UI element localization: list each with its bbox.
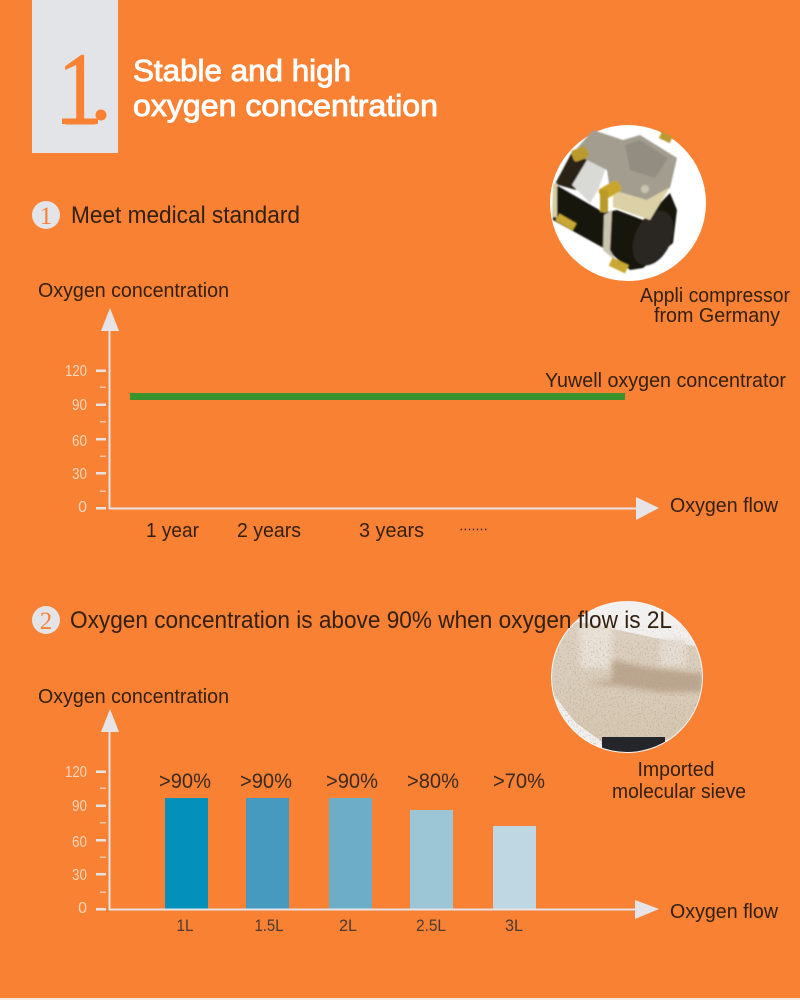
line chart [65,308,786,542]
bars [165,798,536,909]
x labels: 3 years [359,520,424,542]
y tick labels [65,764,87,917]
y ticks labels: 60 [72,433,87,450]
photo: compressor [550,125,706,281]
value labels: >90% [326,770,378,793]
y axis label 1: Oxygen concentration [38,280,229,302]
series label: Yuwell oxygen concentrator [545,370,786,392]
bar chart [65,709,779,935]
y tick labels: 120 [65,764,87,781]
caption: compressor: from Germany [654,305,780,327]
title [133,53,438,123]
category labels: 2.5L [416,916,446,935]
caption: sieve: molecular sieve [612,781,746,803]
number panel: 1 [58,32,100,147]
y ticks labels: 90 [72,397,87,414]
y tick labels: 90 [72,798,87,815]
y axis label 2: Oxygen concentration [38,686,229,708]
category labels: 3L [505,916,523,935]
heading: meet medical standard: Meet medical standard [71,202,300,229]
category labels: 1.5L [254,916,284,935]
caption: sieve [612,759,746,803]
bottom edge line [0,998,800,1000]
title: oxygen concentration [133,88,438,123]
badge 2 [32,606,60,635]
category labels [176,916,523,935]
y axis [96,308,119,510]
series: green line [130,393,625,400]
title: Stable and high [133,53,351,88]
y ticks labels [65,363,87,516]
y tick labels: 30 [72,867,87,884]
x axis label: Oxygen flow [670,495,779,517]
x axis [109,900,659,919]
value labels: >90% [240,770,292,793]
value labels: >90% [159,770,211,793]
x labels: 2 years [237,520,301,542]
y tick labels: 60 [72,834,87,851]
heading: oxygen above 90%: Oxygen concentration is above 90% when oxygen flow is 2L [70,607,672,634]
y axis [96,709,119,910]
x axis [109,497,659,520]
x labels: 1 year [146,520,199,542]
x axis label: Oxygen flow [670,901,779,923]
caption: sieve: Imported [638,759,714,781]
x labels [146,520,487,542]
category labels: 2L [339,916,357,935]
x labels: ....... [460,522,487,533]
caption: compressor [640,285,790,327]
badge 1 [32,201,60,230]
value labels: >70% [493,770,545,793]
photo: molecular sieve [550,600,706,755]
y tick labels: 0 [78,900,87,917]
category labels: 1L [176,916,194,935]
y ticks labels: 0 [78,499,87,516]
badge 2: 2 [40,608,52,635]
value labels [159,770,545,793]
value labels: >80% [407,770,459,793]
y ticks labels: 30 [72,466,87,483]
number panel [32,0,118,153]
caption: compressor: Appli compressor [640,285,790,307]
badge 1: 1 [40,203,52,230]
y ticks labels: 120 [65,363,87,380]
